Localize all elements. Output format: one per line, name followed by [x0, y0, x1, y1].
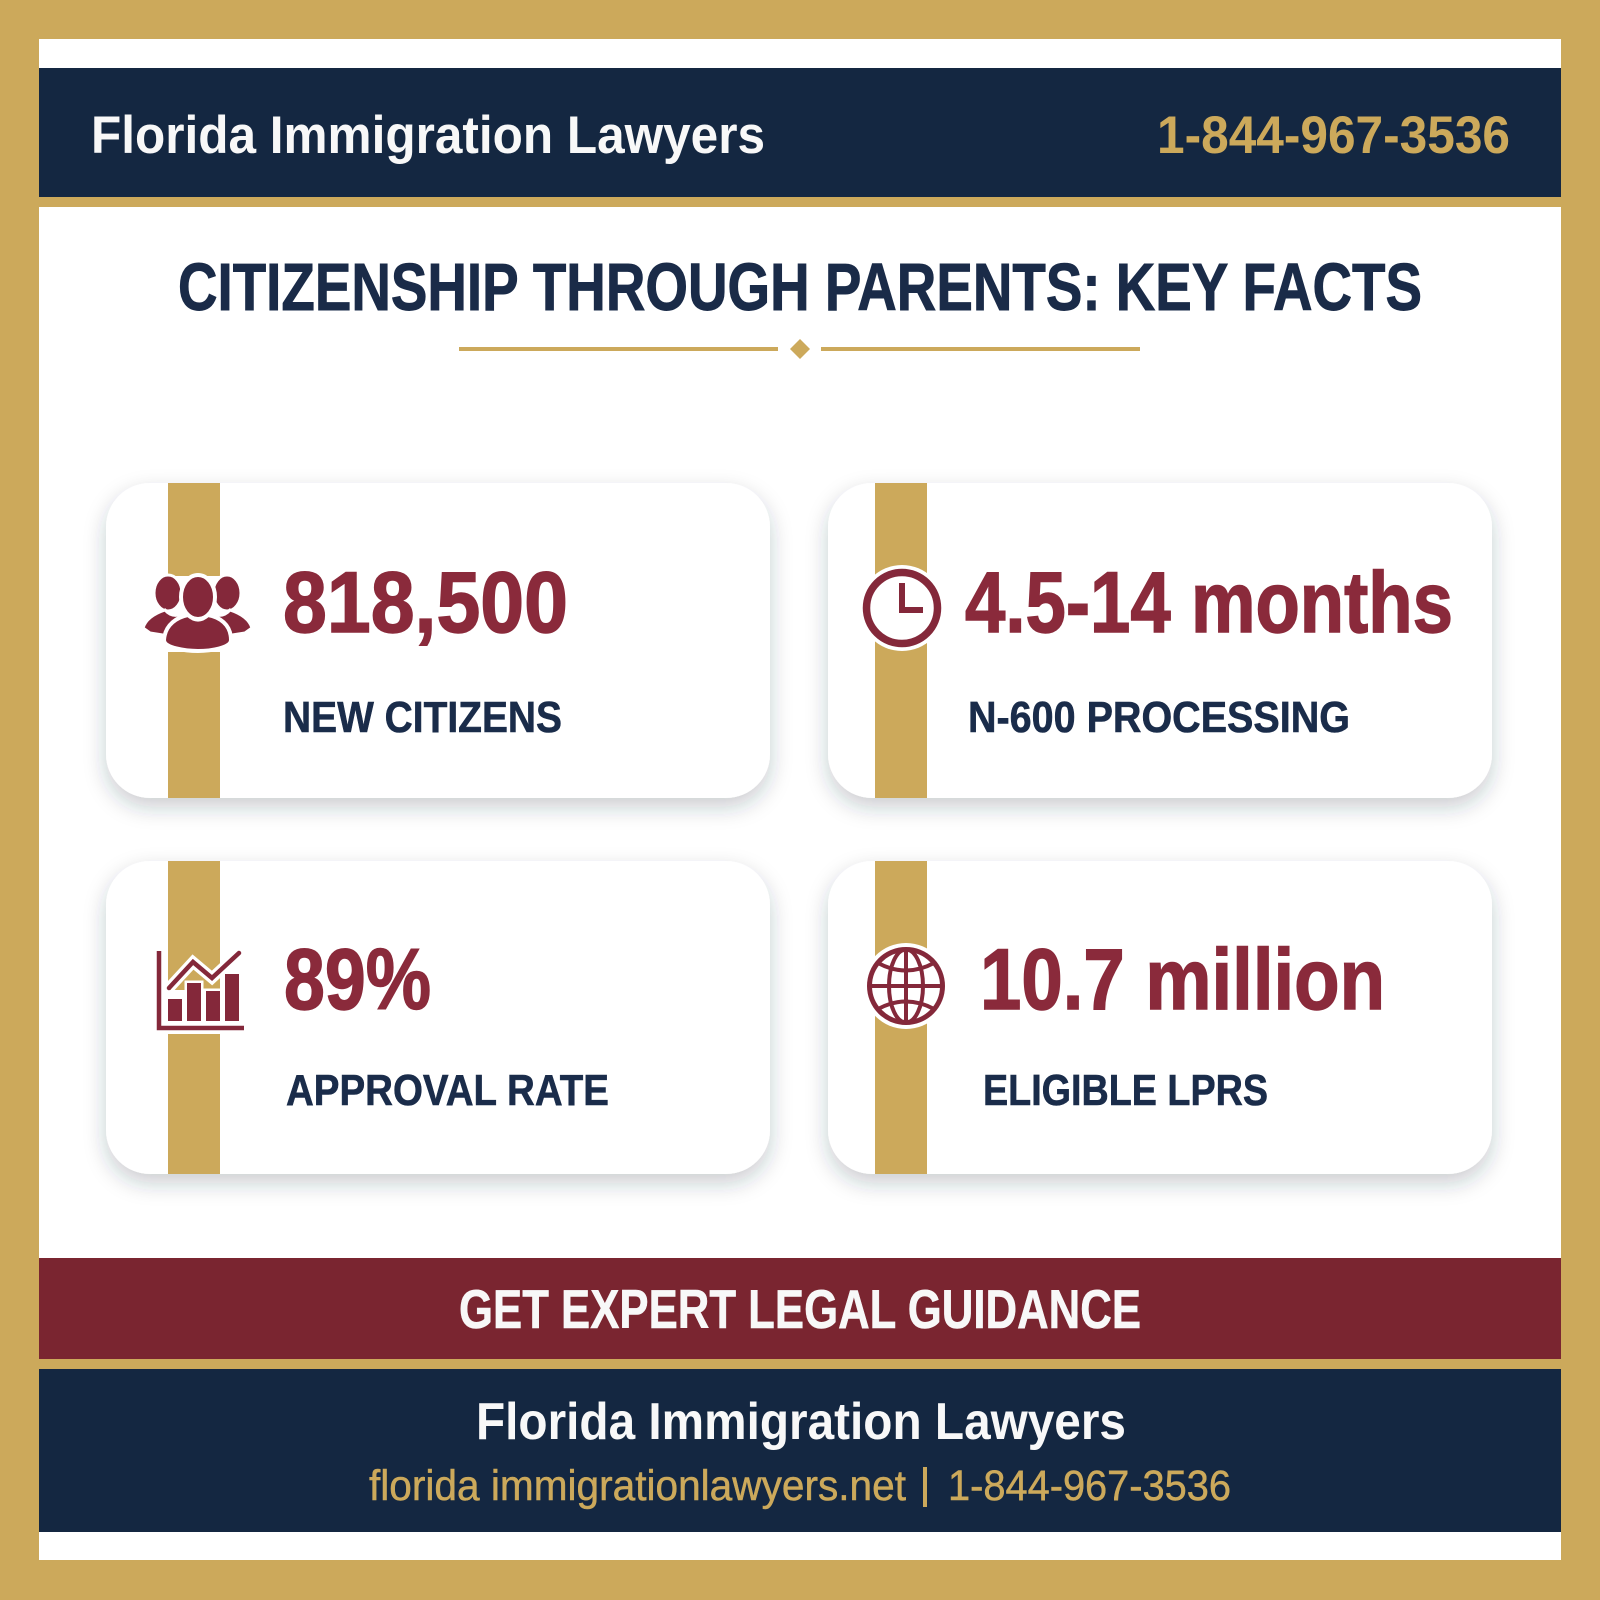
icon: clock: [859, 565, 945, 651]
footer phone number: 1-844-967-3536: [948, 1462, 1231, 1510]
icon: bar chart with trend line: [154, 948, 244, 1034]
header band: [39, 68, 1561, 207]
stat: 818,500: 818,500: [283, 555, 568, 651]
footer band: [39, 1369, 1561, 1532]
label: N-600 processing: N-600 PROCESSING: [968, 693, 1350, 742]
stat: 10.7 million: 10.7 million: [980, 932, 1385, 1028]
label: approval rate: APPROVAL RATE: [286, 1066, 609, 1115]
card: new citizens: [106, 483, 770, 798]
card: eligible LPRs: [828, 861, 1492, 1174]
stat: 4.5-14 months: 4.5-14 months: [965, 555, 1453, 651]
card: approval rate: [106, 861, 770, 1174]
footer pipe separator: [923, 1467, 927, 1507]
stat: 89%: 89%: [284, 932, 431, 1028]
gold separator strip: [39, 1359, 1561, 1369]
footer website: florida immigrationlawyers.net: [369, 1462, 906, 1510]
call-to-action band: [39, 1258, 1561, 1359]
label: new citizens: NEW CITIZENS: [283, 693, 562, 742]
header phone number: 1-844-967-3536: [1157, 106, 1510, 165]
header firm name: Florida Immigration Lawyers: [91, 106, 765, 165]
label: eligible LPRs: ELIGIBLE LPRS: [983, 1066, 1268, 1115]
call-to-action text: GET EXPERT LEGAL GUIDANCE: [459, 1278, 1141, 1340]
title divider with diamond: [459, 339, 1140, 359]
footer firm name: Florida Immigration Lawyers: [476, 1393, 1126, 1451]
icon: group of people: [143, 575, 252, 652]
icon: globe: [863, 943, 949, 1029]
card: N-600 processing: [828, 483, 1492, 798]
